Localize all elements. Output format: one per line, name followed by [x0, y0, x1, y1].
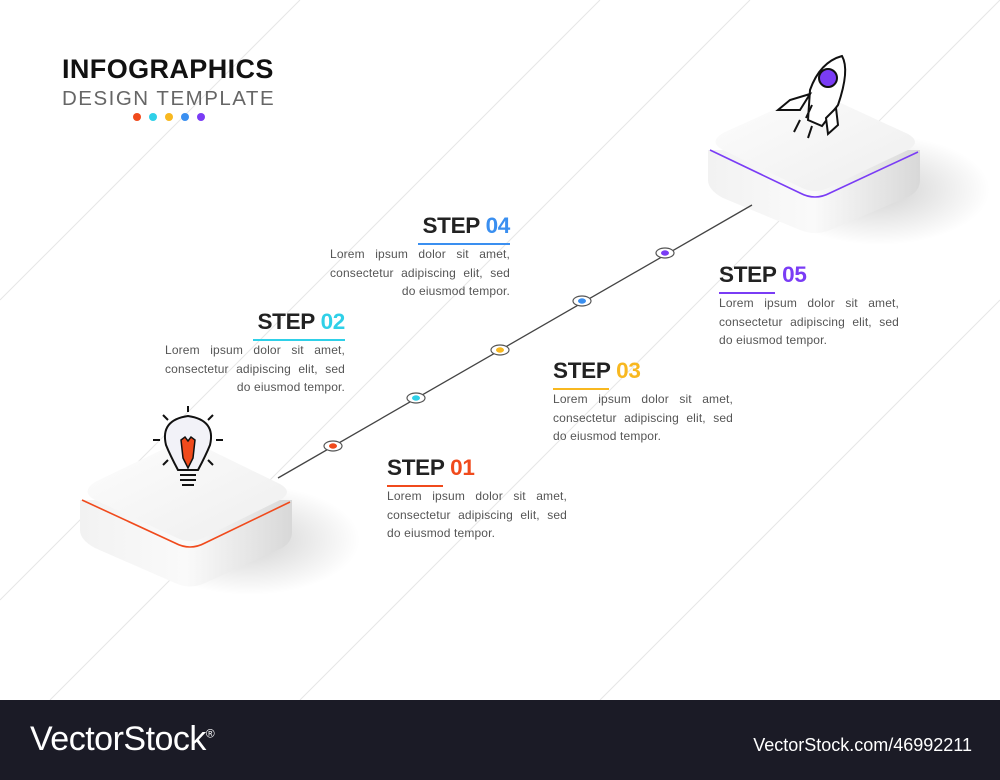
- footer bar: [0, 700, 1000, 780]
- icon: light bulb: [153, 406, 223, 485]
- footer bar: VectorStock.com/46992211: [753, 735, 972, 755]
- step 01: [387, 455, 567, 540]
- step 01: consectetur adipiscing elit, sed: [387, 508, 567, 522]
- step 04: [330, 213, 510, 298]
- step 05: STEP 05: [719, 262, 807, 287]
- step 02: Lorem ipsum dolor sit amet,: [165, 343, 345, 357]
- step 05: [719, 262, 899, 347]
- step 02: [165, 309, 345, 394]
- step 01: do eiusmod tempor.: [387, 526, 495, 540]
- step 05: consectetur adipiscing elit, sed: [719, 315, 899, 329]
- step 03: consectetur adipiscing elit, sed: [553, 411, 733, 425]
- step 05: do eiusmod tempor.: [719, 333, 827, 347]
- step 01: Lorem ipsum dolor sit amet,: [387, 489, 567, 503]
- title: INFOGRAPHICS: [62, 54, 274, 84]
- title color dots: [133, 113, 205, 121]
- timeline line: [278, 205, 752, 478]
- step 03: do eiusmod tempor.: [553, 429, 661, 443]
- step 02: consectetur adipiscing elit, sed: [165, 362, 345, 376]
- box: left: [80, 442, 360, 595]
- step 04: STEP 04: [422, 213, 510, 238]
- timeline dots: [324, 248, 674, 451]
- step 02: do eiusmod tempor.: [237, 380, 345, 394]
- step 05: Lorem ipsum dolor sit amet,: [719, 296, 899, 310]
- step 04: Lorem ipsum dolor sit amet,: [330, 247, 510, 261]
- step 04: consectetur adipiscing elit, sed: [330, 266, 510, 280]
- step 03: [553, 358, 733, 443]
- step 03: Lorem ipsum dolor sit amet,: [553, 392, 733, 406]
- box: right: [708, 94, 990, 245]
- step 02: STEP 02: [257, 309, 345, 334]
- title: DESIGN TEMPLATE: [62, 87, 275, 110]
- step 01: STEP 01: [387, 455, 475, 480]
- step 03: STEP 03: [553, 358, 641, 383]
- title: [62, 54, 275, 110]
- step 04: do eiusmod tempor.: [402, 284, 510, 298]
- icon: rocket: [778, 56, 845, 138]
- footer bar: VectorStock®: [30, 720, 214, 758]
